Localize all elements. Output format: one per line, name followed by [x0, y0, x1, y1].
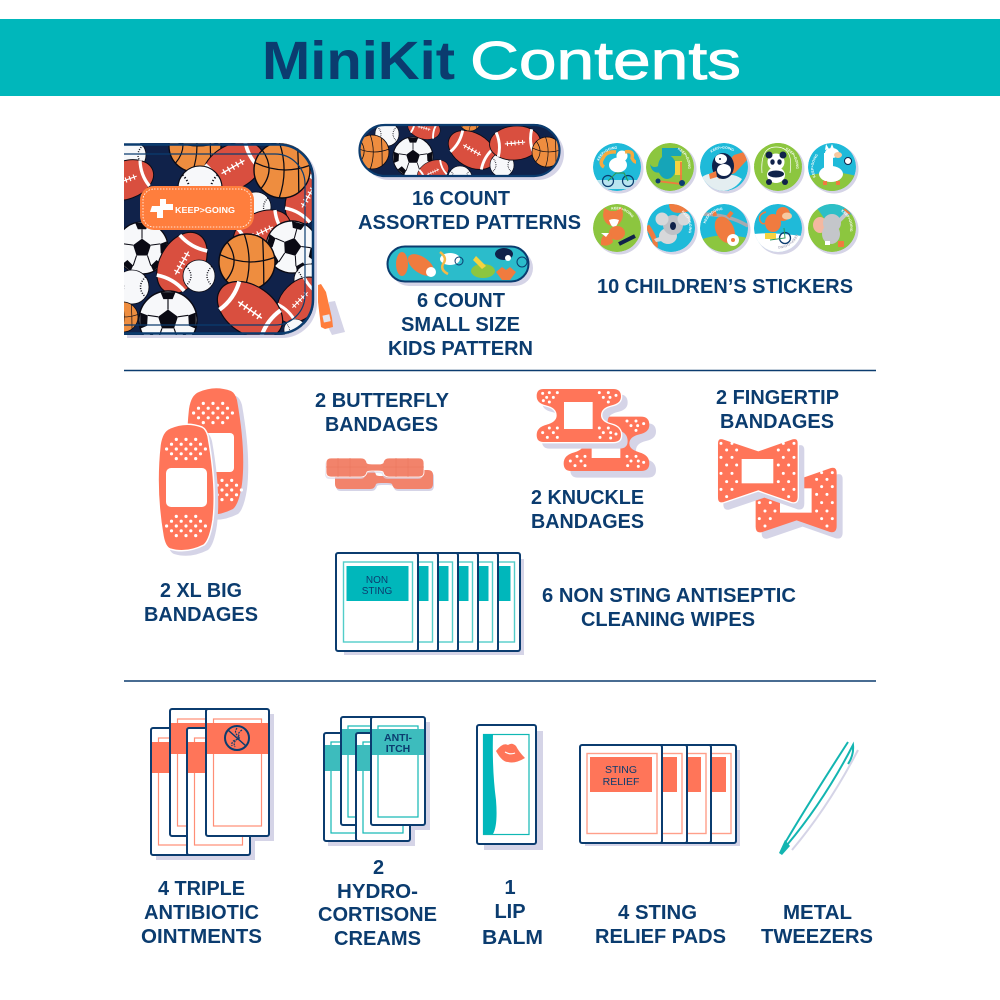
sticker: elephant — [808, 204, 858, 254]
sticker: fox: KEEP>GOING — [611, 206, 634, 218]
band: kids pattern — [387, 246, 533, 286]
sticker: sloth: KEEP>GOING — [703, 208, 722, 224]
XL big bandages — [158, 388, 248, 556]
label: 16 count assorted patterns: ASSORTED PATTERNS — [358, 212, 581, 234]
label: 2 XL big bandages: BANDAGES — [144, 604, 258, 626]
pouch with sports pattern — [124, 143, 345, 338]
antiseptic wipes — [336, 553, 524, 655]
sticker: panda — [754, 143, 804, 194]
pad text: STING — [605, 764, 637, 776]
sticker: dinosaur — [646, 143, 696, 194]
knuckle bandages — [536, 388, 656, 478]
sticker: koala: KEEP>GOING — [682, 210, 692, 233]
sticker: llama — [808, 143, 858, 194]
sticker: penguin — [700, 143, 750, 194]
sticker: penguin: KEEP>GOING — [710, 146, 734, 153]
label: 2 hydro-cortisone creams — [318, 857, 437, 950]
label: 4 sting relief pads: RELIEF PADS — [595, 926, 726, 948]
title text: Contents — [470, 31, 741, 91]
label: 2 knuckle bandages: BANDAGES — [531, 511, 644, 533]
label: 2 knuckle bandages: 2 KNUCKLE — [531, 487, 644, 509]
label: 6 count small size kids pattern: KIDS PATTERN — [388, 338, 533, 360]
metal tweezers — [779, 742, 858, 855]
label: 4 triple antibiotic ointments: OINTMENTS — [141, 926, 262, 948]
label: 6 count small size kids pattern: 6 COUNT — [417, 290, 505, 312]
label: 6 count small size kids pattern — [388, 290, 533, 360]
wipe text: NON — [366, 575, 388, 586]
title text: MiniKit — [262, 31, 455, 91]
sticker: llama: KEEP>GOING — [811, 154, 818, 178]
sticker: koala — [647, 204, 698, 254]
sticker: sloth — [700, 204, 750, 254]
stickers — [593, 143, 858, 254]
label: 2 hydro-cortisone creams: 2 — [373, 857, 384, 879]
sticker: fox — [593, 204, 644, 254]
hydrocortisone creams: ITCH — [386, 743, 410, 755]
label: 1 lip balm: LIP — [494, 901, 526, 923]
icon: no bacteria — [225, 726, 249, 750]
label: 16 count assorted patterns: 16 COUNT — [412, 188, 510, 210]
label: 6 non sting antiseptic cleaning wipes: CLEANING WIPES — [581, 609, 755, 631]
wave stripe — [483, 734, 497, 834]
brand patch — [140, 186, 254, 230]
label: 10 children's stickers: 10 CHILDREN’S STICKERS — [597, 276, 853, 298]
label: metal tweezers: TWEEZERS — [761, 926, 873, 948]
label: 4 sting relief pads: 4 STING — [618, 902, 697, 924]
antiseptic wipes: STING — [362, 586, 392, 597]
label: metal tweezers: METAL — [783, 902, 852, 924]
sticker: monkey — [754, 204, 804, 254]
label: 1 lip balm: BALM — [482, 927, 543, 949]
sticker: panda: KEEP>GOING — [786, 148, 799, 169]
label: 6 non sting antiseptic cleaning wipes: 6 NON STING ANTISEPTIC — [542, 585, 796, 607]
label: 4 sting relief pads — [595, 902, 726, 948]
label: 2 fingertip bandages — [716, 387, 839, 433]
label: 2 butterfly bandages: 2 BUTTERFLY — [315, 390, 450, 412]
fingertip bandages — [717, 438, 843, 539]
band: assorted sports pattern — [358, 124, 564, 180]
label: 2 butterfly bandages — [315, 390, 450, 436]
sticker: unicorn: KEEP>GOING — [596, 146, 617, 161]
label: 2 butterfly bandages: BANDAGES — [325, 414, 438, 436]
cream text: ANTI- — [384, 732, 412, 744]
title banner — [0, 19, 1000, 96]
brand patch: KEEP>GOING — [175, 205, 235, 215]
label: 2 hydro-cortisone creams: CREAMS — [334, 928, 421, 950]
sticker: elephant: KEEP>GOING — [841, 209, 853, 232]
label: 1 lip balm — [482, 877, 543, 949]
label: 6 non sting antiseptic cleaning wipes — [542, 585, 796, 631]
label: 2 XL big bandages: 2 XL BIG — [160, 580, 242, 602]
label: 1 lip balm: 1 — [504, 877, 516, 899]
sting relief pads — [580, 745, 740, 846]
label: 4 triple antibiotic ointments: ANTIBIOTIC — [144, 902, 259, 924]
label: 2 hydro-cortisone creams: HYDRO- — [337, 881, 418, 903]
sticker: unicorn — [593, 143, 644, 194]
label: 4 triple antibiotic ointments: 4 TRIPLE — [158, 878, 245, 900]
butterfly bandages — [325, 458, 434, 491]
sting relief pads: RELIEF — [603, 776, 639, 788]
label: 16 count assorted patterns — [358, 188, 581, 234]
label: 2 hydro-cortisone creams: CORTISONE — [318, 904, 437, 926]
icon: lips — [496, 744, 525, 762]
sticker: monkey: KEEP>GOING — [778, 234, 798, 249]
label: 2 fingertip bandages: 2 FINGERTIP — [716, 387, 839, 409]
label: metal tweezers — [761, 902, 873, 948]
lip balm — [477, 725, 543, 850]
sticker: dinosaur: KEEP>GOING — [678, 148, 691, 169]
label: 4 triple antibiotic ointments — [141, 878, 262, 948]
triple antibiotic ointments — [151, 709, 274, 860]
label: 2 knuckle bandages — [531, 487, 644, 533]
hydrocortisone creams — [324, 717, 430, 846]
label: 2 XL big bandages — [144, 580, 258, 626]
label: 6 count small size kids pattern: SMALL SIZE — [401, 314, 520, 336]
label: 2 fingertip bandages: BANDAGES — [720, 411, 834, 433]
zipper pull — [318, 284, 345, 335]
